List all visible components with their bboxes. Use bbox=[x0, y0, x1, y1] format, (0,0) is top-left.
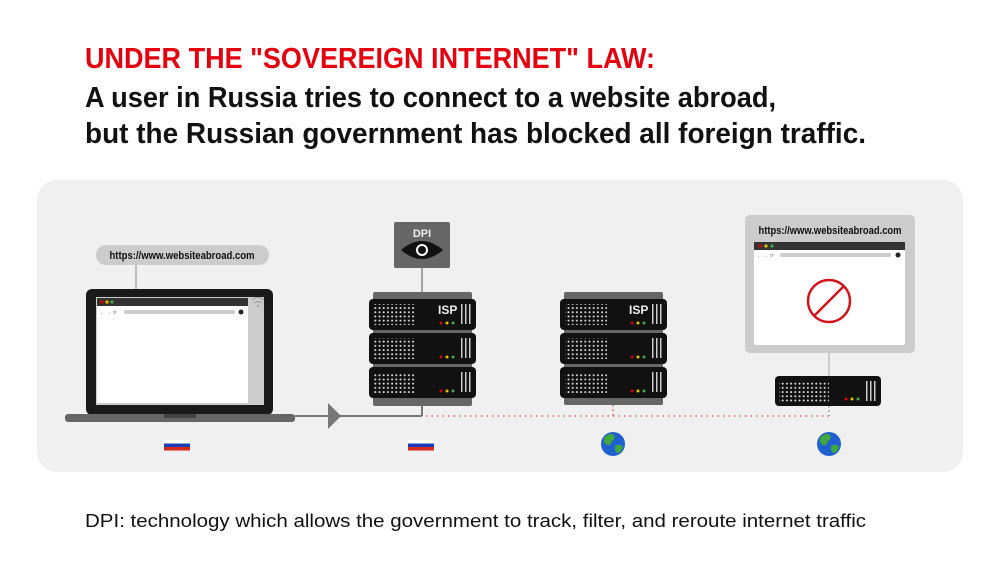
icon: laptop bbox=[65, 289, 295, 422]
URL pill: https://www.websiteabroad.com bbox=[110, 250, 255, 262]
footnote: DPI: technology which allows the government to track, filter, and reroute internet traffic bbox=[85, 511, 866, 531]
icon: blocked sign bbox=[808, 280, 850, 322]
panel: diagram bbox=[37, 180, 963, 472]
connection line with arrow bbox=[295, 403, 422, 429]
icon: laptop: ← → ⟳ bbox=[100, 310, 118, 316]
title: A user in Russia tries to connect to a website abroad, bbox=[85, 82, 776, 114]
DPI box bbox=[394, 222, 450, 292]
ISP server stack Russia: ISP bbox=[438, 303, 457, 317]
website window: ← → ⟳ bbox=[757, 253, 775, 259]
flag: Russia 2 bbox=[408, 440, 434, 450]
DPI box: DPI bbox=[413, 228, 431, 240]
title: UNDER THE "SOVEREIGN INTERNET" LAW: bbox=[85, 43, 655, 75]
website window bbox=[745, 215, 915, 376]
ISP server stack Russia bbox=[369, 292, 476, 406]
dotted blocked line bbox=[426, 405, 829, 416]
URL pill bbox=[96, 245, 269, 312]
web server bbox=[775, 376, 881, 406]
title: but the Russian government has blocked all foreign traffic. bbox=[85, 118, 866, 150]
ISP server stack abroad: ISP bbox=[629, 303, 648, 317]
icon: globe 1 bbox=[601, 432, 625, 456]
ISP server stack abroad bbox=[560, 292, 667, 405]
title bbox=[85, 43, 866, 150]
icon: globe 2 bbox=[817, 432, 841, 456]
website window: https://www.websiteabroad.com bbox=[758, 225, 902, 237]
flag: Russia 1 bbox=[164, 440, 190, 450]
